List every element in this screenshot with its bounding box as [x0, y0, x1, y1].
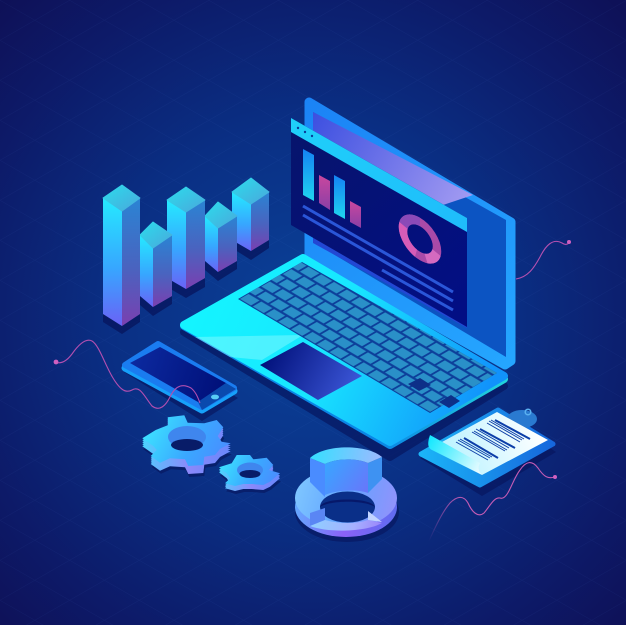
- earphone wire: left: [54, 340, 200, 408]
- paper lines: [456, 420, 530, 460]
- laptop deck: [184, 258, 504, 442]
- ring hole: [320, 492, 375, 522]
- bar chart: 3D columns: [103, 178, 269, 334]
- column 2: [140, 222, 172, 307]
- gear: large: [142, 415, 232, 477]
- earphone wire: bottom right: [428, 463, 557, 543]
- laptop base edge: [184, 259, 504, 445]
- column 1: [103, 185, 140, 326]
- column shadows: [103, 240, 269, 334]
- window header: [291, 118, 467, 232]
- ring chart: 3D donut: [295, 447, 399, 542]
- earphone wire: top right: [516, 240, 571, 279]
- column 5: [232, 178, 269, 251]
- ring shadow: [295, 482, 399, 542]
- phone screen: [130, 347, 226, 402]
- mini bar chart: [303, 149, 361, 228]
- gear: small: [219, 455, 281, 494]
- paper curl: [428, 435, 482, 475]
- ring top surface: [295, 468, 397, 528]
- column 3: [167, 187, 205, 289]
- app window: [291, 118, 467, 327]
- laptop base shadow: [184, 265, 504, 457]
- paper sheet: [428, 412, 548, 475]
- ring body: [295, 477, 397, 537]
- touchpad: [260, 342, 362, 400]
- text lines: [303, 206, 453, 310]
- lower segment: [310, 508, 382, 531]
- raised segment: [310, 447, 382, 497]
- column 4: [205, 202, 237, 272]
- donut chart: [403, 212, 437, 266]
- clipboard clip: [507, 409, 537, 428]
- ring hole upper edge: [320, 500, 375, 507]
- laptop lid: [309, 102, 511, 365]
- phone: [124, 344, 238, 421]
- clipboard: [420, 409, 556, 496]
- laptop: [184, 102, 511, 457]
- keyboard: [238, 262, 497, 413]
- phone home button: [211, 395, 219, 399]
